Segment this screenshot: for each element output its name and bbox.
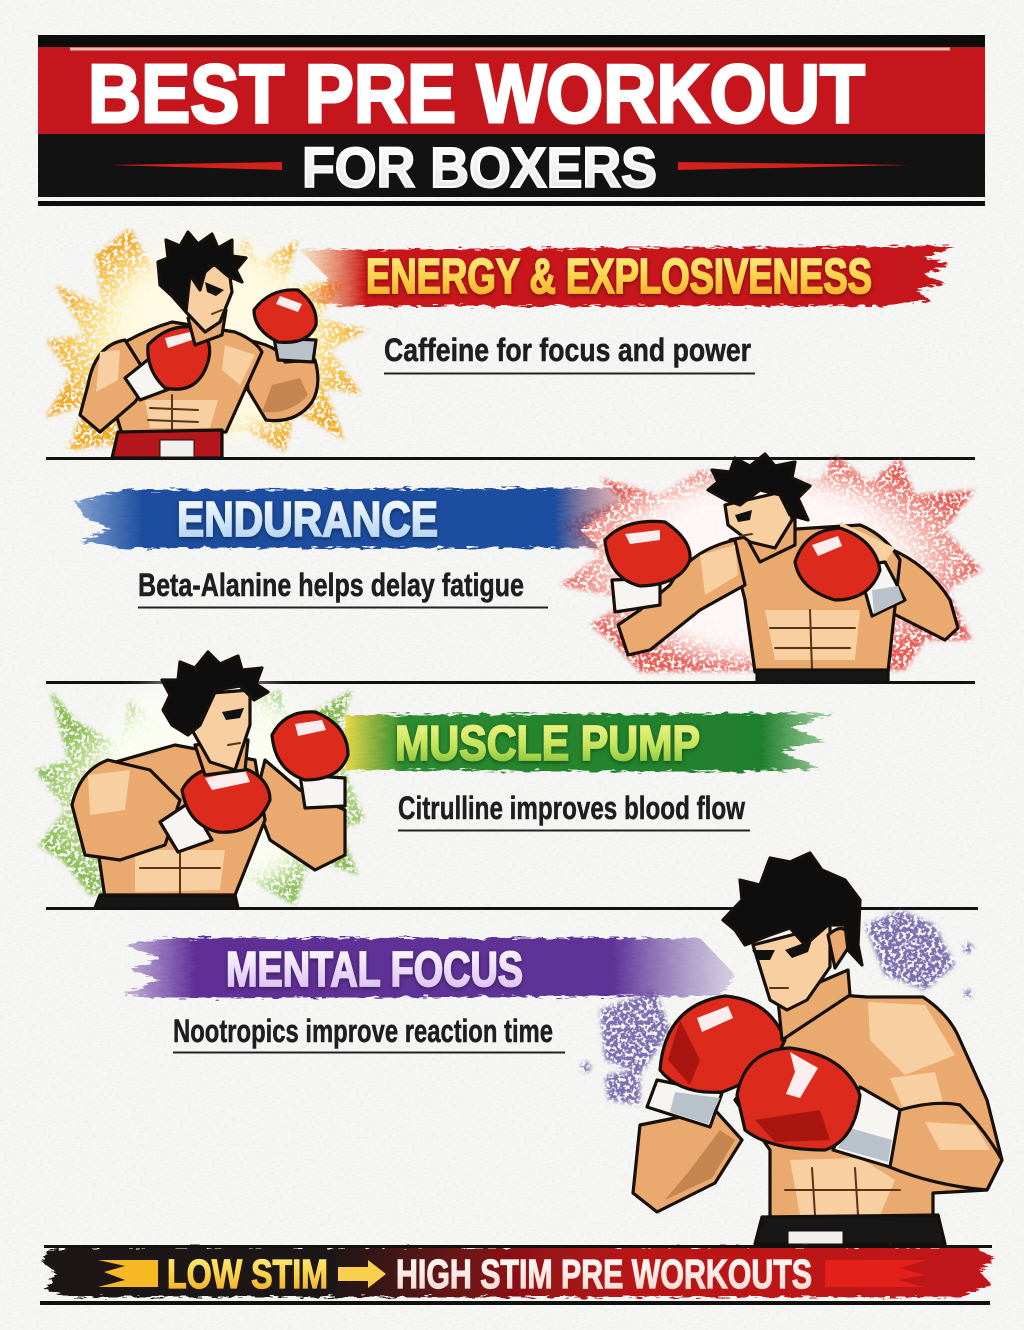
panel: endurance [75,454,982,682]
burst: green energy [35,675,375,905]
caption: Caffeine for focus and power [384,332,751,368]
caption: Beta-Alanine helps delay fatigue [138,567,524,603]
title banner [38,35,985,206]
boxer illustration three [72,652,348,908]
section heading band [75,488,640,548]
caption: Nootropics improve reaction time [173,1013,553,1049]
burst: red energy [555,455,982,672]
section heading band: MUSCLE PUMP [395,717,700,771]
yellow bar [98,1260,158,1287]
panel: muscle pump [35,652,835,908]
divider [46,457,975,460]
red bar [825,1260,927,1287]
boxer illustration two [605,454,958,682]
burst: purple spray [581,910,973,1105]
panel: energy and explosiveness [45,228,955,458]
caption: Citrulline improves blood flow [398,790,745,826]
divider [46,907,978,910]
section heading band [345,713,835,772]
divider [46,681,975,684]
bottom scale banner [40,1245,995,1305]
title line one: BEST PRE WORKOUT [88,47,865,140]
title line two: FOR BOXERS [302,136,657,200]
high stim label: HIGH STIM PRE WORKOUTS [396,1251,812,1297]
burst: yellow energy [45,228,368,452]
low stim label: LOW STIM [167,1251,328,1297]
section heading band [122,938,735,998]
boxer illustration four [633,853,1002,1244]
section heading band: ENDURANCE [177,493,438,547]
arrow [338,1260,386,1288]
section heading band: MENTAL FOCUS [226,943,523,997]
panel: mental focus [122,853,1002,1244]
boxer illustration one [80,232,318,458]
